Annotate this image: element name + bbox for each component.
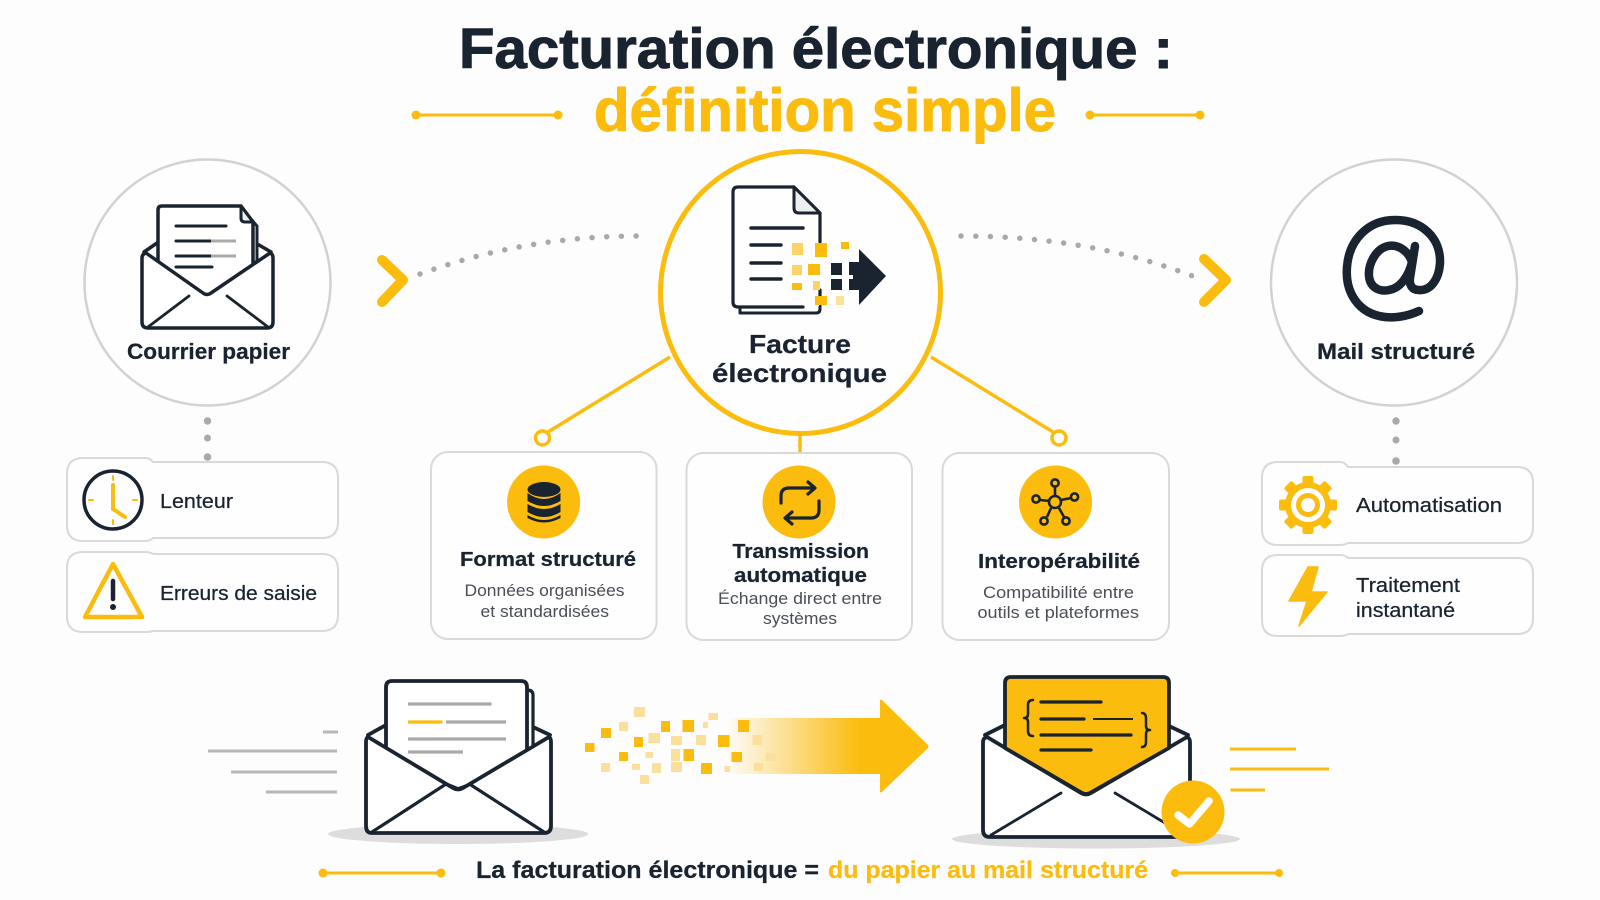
icon: structured envelope bottom [952, 677, 1240, 848]
label: Mail structuré [1317, 339, 1475, 364]
pill: automatisation [1262, 462, 1533, 545]
pill: erreurs de saisie [67, 552, 338, 632]
icon: network nodes [1019, 466, 1092, 538]
icon: check badge [1162, 780, 1224, 844]
bottom conclusion text: La facturation électronique = [476, 857, 819, 884]
label: Automatisation [1356, 495, 1502, 517]
title line 2: définition simple [594, 77, 1056, 144]
connector: centre branch [798, 432, 802, 454]
speed lines right [1230, 749, 1329, 790]
icon: gear [1279, 476, 1337, 534]
heading: Interopérabilité [978, 550, 1140, 573]
icon: sync arrows [762, 466, 836, 538]
dotted link right [1392, 417, 1400, 465]
icon: paper letter in envelope [142, 206, 273, 328]
right dotted arc [961, 236, 1195, 277]
label: instantané [1356, 600, 1455, 622]
title right rule [1086, 110, 1204, 120]
description: outils et plateformes [978, 603, 1139, 622]
description: et standardisées [480, 602, 609, 621]
description [978, 583, 1139, 622]
pill: traitement instantané [1262, 555, 1533, 636]
panel: mail structuré circle [1271, 160, 1517, 406]
title line 1: Facturation électronique : [459, 17, 1173, 81]
label [712, 329, 887, 388]
heading: Transmission [732, 540, 869, 563]
bottom right rule [1171, 869, 1283, 877]
bottom left rule [318, 868, 446, 878]
description: Compatibilité entre [983, 583, 1134, 602]
title left rule [412, 110, 562, 120]
card: interopérabilité [942, 453, 1169, 640]
label: Facture [749, 329, 851, 359]
label: Erreurs de saisie [160, 583, 317, 605]
pill: lenteur [67, 458, 338, 541]
heading: Format structuré [460, 548, 636, 571]
icon: paper envelope bottom [328, 681, 588, 844]
description [718, 589, 882, 628]
left chevron arrow [382, 260, 403, 302]
connector: right branch [931, 357, 1066, 445]
card: transmission automatique [686, 453, 912, 640]
description: Échange direct entre [718, 589, 882, 608]
left dotted arc [420, 236, 638, 274]
arrow: pixels to mail [585, 700, 928, 792]
panel: facture électronique circle [660, 152, 940, 434]
heading [732, 540, 869, 587]
icon: at sign [1347, 220, 1440, 317]
label [1356, 575, 1460, 622]
icon: warning triangle [85, 564, 142, 617]
description: Données organisées [464, 581, 624, 600]
bottom conclusion text [476, 857, 1148, 884]
bottom conclusion text: du papier au mail structuré [828, 857, 1148, 884]
heading: automatique [734, 564, 867, 587]
label: Courrier papier [127, 339, 290, 364]
speed lines left [208, 732, 338, 792]
panel: courrier papier circle [84, 160, 330, 406]
connector: left branch [536, 357, 670, 445]
label: Lenteur [160, 491, 233, 513]
label: Traitement [1356, 575, 1460, 597]
description: systèmes [763, 609, 837, 628]
title [459, 17, 1173, 144]
card: format structuré [431, 452, 656, 639]
icon: document turning to digital [733, 187, 886, 313]
icon: lightning bolt [1289, 567, 1327, 626]
dotted link left [204, 417, 211, 461]
label: électronique [712, 358, 887, 388]
right chevron arrow [1204, 259, 1226, 302]
icon: database [507, 466, 580, 538]
icon: clock [84, 471, 142, 529]
description [464, 581, 624, 621]
